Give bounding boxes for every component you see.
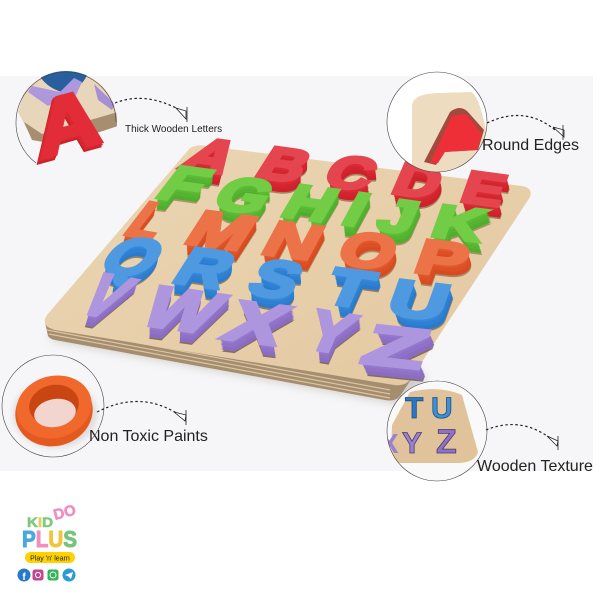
arrow: round edges [487, 115, 555, 130]
icon: telegram [62, 568, 76, 582]
letter O: O [330, 221, 406, 280]
letter X: X [213, 289, 301, 357]
logo word: DO: DO [52, 502, 78, 524]
callout: wooden texture: T [405, 392, 423, 425]
logo: Kiddo Plus [18, 502, 78, 583]
callout: thick wooden letters [16, 71, 222, 165]
callout: non toxic paints [2, 355, 208, 457]
icon: facebook: f [22, 572, 26, 583]
callout: wooden texture: U [431, 392, 453, 425]
letter I: I [334, 183, 379, 236]
callout: thick wooden letters: A [28, 75, 102, 179]
letter K: K [425, 195, 493, 252]
letter Z: Z [354, 313, 438, 381]
letter P: P [408, 229, 476, 288]
tagline pill: Play 'n' learn [30, 556, 70, 562]
icon: cursor [553, 125, 564, 140]
callout: wooden texture: Y [402, 427, 422, 460]
letter B: B [246, 137, 322, 192]
wooden board [45, 145, 531, 404]
letter V: V [66, 262, 148, 330]
label: thick wooden letters: Thick Wooden Letters [125, 124, 222, 135]
icon: cursor [174, 410, 186, 425]
icon: cursor [547, 436, 558, 450]
letter T: T [316, 257, 384, 319]
label: non toxic paints: Non Toxic Paints [89, 428, 208, 445]
letter E: E [455, 161, 513, 216]
callout: wooden texture: Z [436, 423, 457, 461]
letter W: W [129, 275, 237, 345]
icon: whatsapp [48, 570, 58, 580]
callout: wooden texture: X [380, 428, 399, 459]
letter J: J [369, 189, 427, 244]
alphabet letters on board [66, 128, 513, 382]
callout: wooden texture [380, 381, 593, 481]
letter N: N [253, 211, 333, 270]
callout: round edges [387, 72, 579, 175]
logo word: KID: KID [27, 515, 53, 530]
arrow: thick letters [115, 98, 180, 110]
label: wooden texture: Wooden Texture [477, 458, 593, 475]
arrow: non toxic paints [97, 401, 178, 414]
letter F: F [145, 157, 223, 213]
letter M: M [175, 201, 267, 260]
letter D: D [385, 153, 451, 208]
logo word: PLUS: PLUS [22, 526, 77, 552]
label: round edges: Round Edges [482, 137, 579, 154]
letter U: U [380, 268, 458, 332]
letter G: G [203, 167, 285, 224]
letter S: S [238, 248, 314, 310]
arrow: wooden texture [486, 425, 550, 438]
callout: thick wooden letters: A [29, 73, 103, 177]
letter L: L [114, 192, 185, 249]
icon: instagram [32, 570, 44, 580]
letter C: C [316, 145, 387, 200]
letter Q: Q [87, 225, 179, 289]
letter A: A [170, 128, 252, 183]
callout: thick wooden letters: A [31, 71, 105, 175]
letter Y: Y [296, 298, 366, 366]
letter R: R [163, 236, 247, 300]
icon: cursor [176, 107, 187, 122]
letter H: H [272, 175, 348, 232]
